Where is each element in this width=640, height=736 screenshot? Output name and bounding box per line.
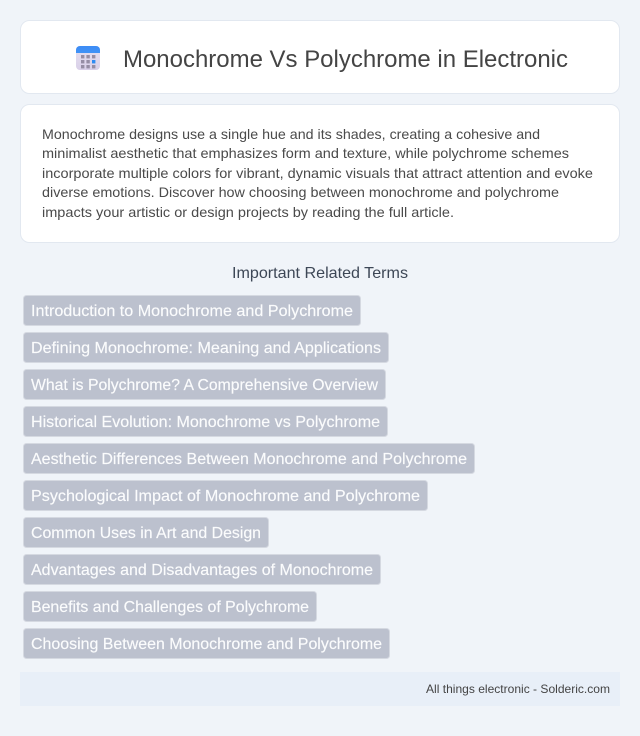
icon: calendar — [76, 46, 100, 70]
term 7 — [24, 518, 268, 548]
text block: description: diverse emotions. Discover how choosing between monochrome and polychrome — [42, 184, 559, 200]
footer: All things electronic - Solderic.com — [426, 682, 610, 696]
term 6: Psychological Impact of Monochrome and Polychrome — [31, 488, 420, 505]
term 4 — [24, 406, 388, 436]
term 6 — [24, 480, 428, 510]
term 8 — [24, 554, 380, 584]
text block: description: impacts your artistic or design projects by reading the full article. — [42, 204, 454, 220]
list: related terms — [24, 296, 474, 658]
text block: description: Monochrome designs use a single hue and its shades, creating a cohesive and — [42, 126, 540, 142]
term 2 — [24, 332, 388, 362]
term 3 — [24, 370, 386, 400]
title: Monochrome Vs Polychrome in Electronic — [123, 46, 568, 73]
panel: title card — [20, 20, 620, 94]
term 7: Common Uses in Art and Design — [31, 525, 261, 542]
term 5: Aesthetic Differences Between Monochrome and Polychrome — [31, 451, 467, 468]
term 9 — [24, 592, 316, 622]
term 4: Historical Evolution: Monochrome vs Polychrome — [31, 414, 380, 431]
text block: description: incorporate multiple colors for vibrant, dynamic visuals that attract attention and evoke — [42, 165, 593, 181]
term 9: Benefits and Challenges of Polychrome — [31, 599, 309, 616]
footer — [20, 672, 620, 706]
heading: important related terms: Important Related Terms — [232, 265, 408, 282]
term 10: Choosing Between Monochrome and Polychrome — [31, 636, 382, 653]
term 10 — [24, 628, 390, 658]
term 2: Defining Monochrome: Meaning and Applications — [31, 340, 381, 357]
text block: description: minimalist aesthetic that emphasizes form and texture, while polychrome schemes — [42, 145, 569, 161]
term 8: Advantages and Disadvantages of Monochrome — [31, 562, 373, 579]
panel: description — [20, 104, 620, 242]
term 1 — [24, 296, 360, 326]
term 5 — [24, 444, 474, 474]
term 3: What is Polychrome? A Comprehensive Overview — [31, 377, 378, 394]
text block: description — [42, 126, 593, 220]
term 1: Introduction to Monochrome and Polychrome — [31, 303, 353, 320]
